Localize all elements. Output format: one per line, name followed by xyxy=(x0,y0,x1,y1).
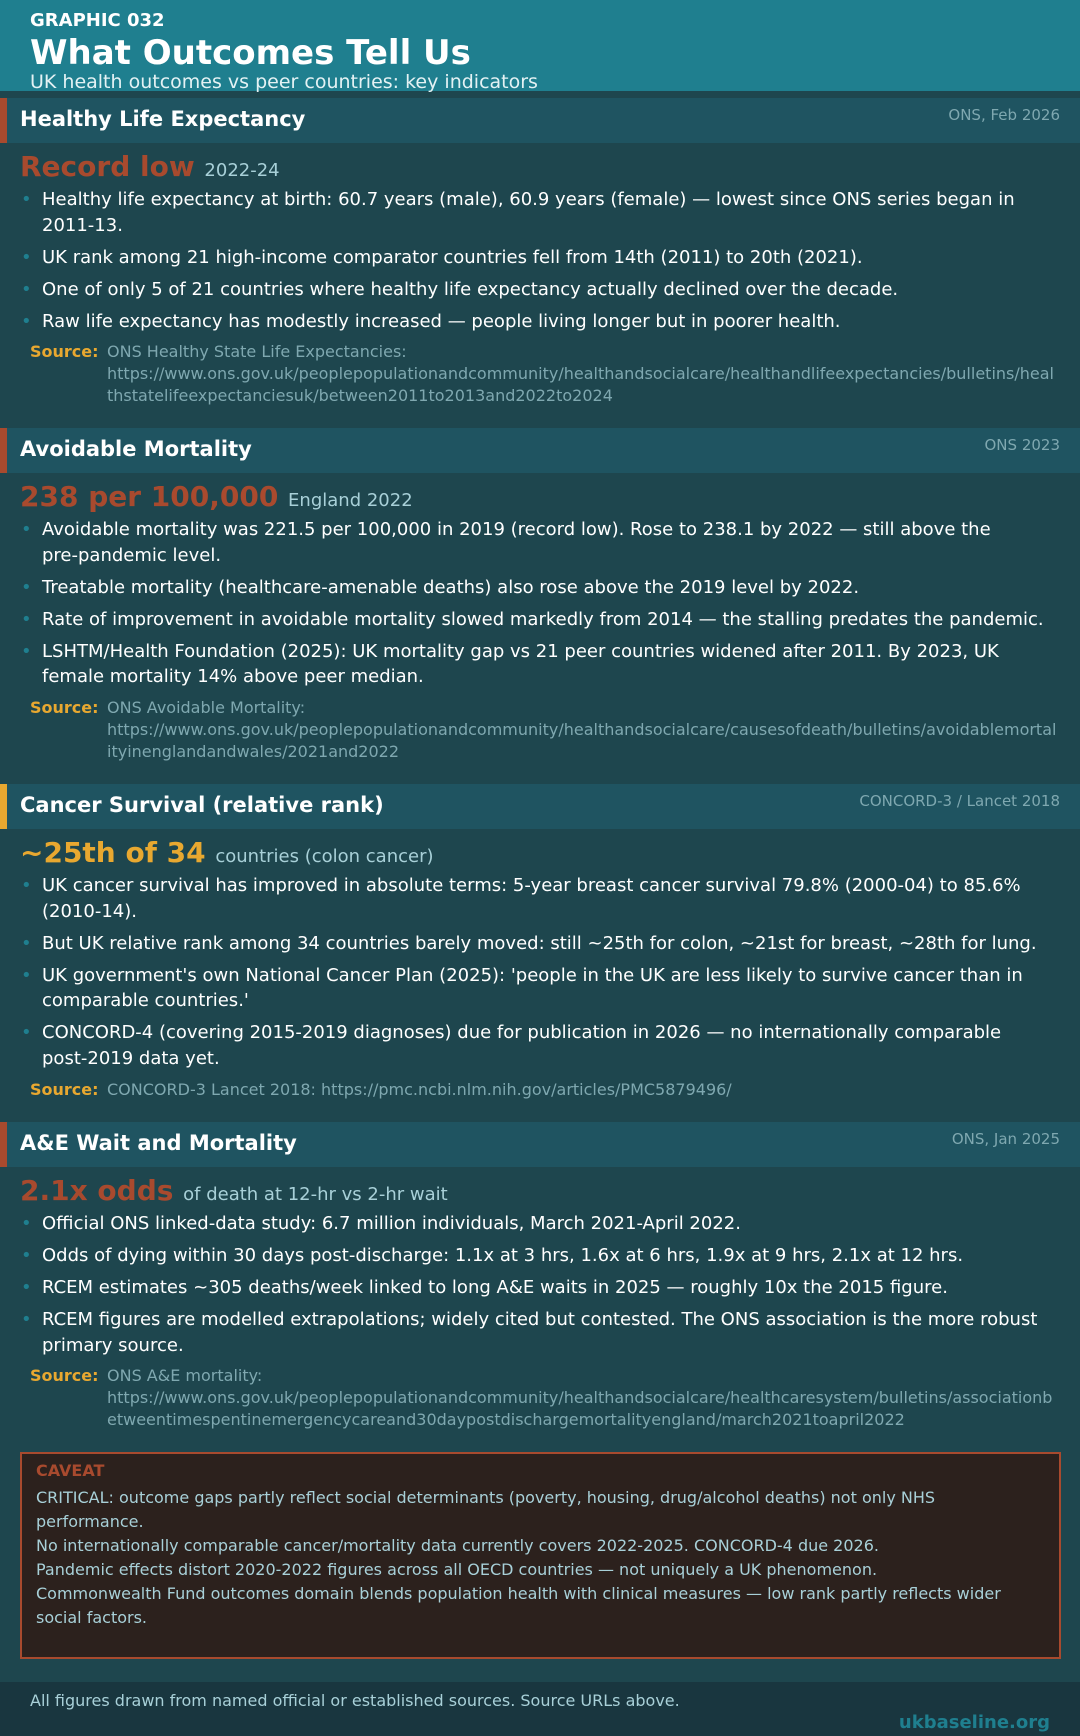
caveat text: Commonwealth Fund outcomes domain blends population health with clinical measures — low rank partly reflects wider xyxy=(36,1584,1001,1603)
caveat text xyxy=(36,1488,1001,1627)
section header: Avoidable Mortality xyxy=(0,428,1080,473)
source: healthy life expectancy xyxy=(30,342,1054,405)
key stat: record low: Record low 2022-24 xyxy=(20,150,280,183)
graphic number: GRAPHIC 032 xyxy=(30,10,165,31)
section header: Cancer Survival: Cancer Survival (relative rank) xyxy=(20,793,384,817)
bullet list: A&E: • xyxy=(21,1245,32,1266)
bullet list: cancer survival: • xyxy=(21,1022,32,1043)
bullet list: cancer survival: • xyxy=(21,875,32,896)
source: avoidable mortality: https://www.ons.gov.uk/peoplepopulationandcommunity/healthandsocialcare/causesofdeath/bulletins/avoidablemortal xyxy=(107,720,1056,739)
bullet list: A&E: RCEM figures are modelled extrapolations; widely cited but contested. The ONS association is the more robust xyxy=(42,1309,1037,1330)
bullet list: A&E: RCEM estimates ~305 deaths/week linked to long A&E waits in 2025 — roughly 10x the 2015 figure. xyxy=(42,1277,948,1298)
header banner xyxy=(0,0,1080,91)
section header: Avoidable Mortality: ONS 2023 xyxy=(984,436,1060,454)
section header: Healthy Life Expectancy xyxy=(0,98,1080,143)
source: healthy life expectancy: Source: xyxy=(30,342,99,360)
bullet list: cancer survival: • xyxy=(21,965,32,986)
bullet list: avoidable mortality: Rate of improvement in avoidable mortality slowed markedly from 2014 — the stalling predates the pandemic. xyxy=(42,609,1044,630)
bullet list: A&E: Odds of dying within 30 days post-discharge: 1.1x at 3 hrs, 1.6x at 6 hrs, 1.9x at 9 hrs, 2.1x at 12 hrs. xyxy=(42,1245,963,1266)
caveat text: No internationally comparable cancer/mortality data currently covers 2022-2025. CONCORD-4 due 2026. xyxy=(36,1536,879,1555)
source: avoidable mortality: Source: xyxy=(30,698,99,717)
bullet list: cancer survival: But UK relative rank among 34 countries barely moved: still ~25th for colon, ~21st for breast, ~28th for lung. xyxy=(42,933,1037,954)
bullet list: avoidable mortality: • xyxy=(21,577,32,598)
bullet list: healthy life expectancy: Raw life expectancy has modestly increased — people living longer but in poorer health. xyxy=(42,311,841,332)
footer brand: ukbaseline.org xyxy=(899,1712,1050,1733)
bullet list: healthy life expectancy: UK rank among 21 high-income comparator countries fell from 14th (2011) to 20th (2021). xyxy=(42,247,863,268)
bullet list: healthy life expectancy xyxy=(21,189,1015,332)
caveat text: Pandemic effects distort 2020-2022 figures across all OECD countries — not uniquely a UK phenomenon. xyxy=(36,1560,877,1579)
bullet list: A&E: primary source. xyxy=(42,1335,184,1356)
key stat: 25th of 34: ~25th of 34 countries (colon cancer) xyxy=(20,836,434,869)
bullet list: healthy life expectancy: • xyxy=(21,247,32,268)
bullet list: A&E xyxy=(21,1213,1037,1356)
bullet list: healthy life expectancy: 2011-13. xyxy=(42,215,123,236)
bullet list: A&E: • xyxy=(21,1213,32,1234)
source: healthy life expectancy: ONS Healthy State Life Expectancies: xyxy=(107,342,407,360)
section header: A&E wait and mortality: A&E Wait and Mortality xyxy=(20,1131,297,1155)
bullet list: cancer survival: (2010-14). xyxy=(42,901,137,922)
bullet list: avoidable mortality: pre-pandemic level. xyxy=(42,545,221,566)
source: healthy life expectancy: thstatelifeexpectanciesuk/between2011to2013and2022to2024 xyxy=(107,386,613,405)
bullet list: cancer survival: post-2019 data yet. xyxy=(42,1048,220,1069)
bullet list: cancer survival: UK cancer survival has improved in absolute terms: 5-year breast cancer survival 79.8% (2000-04) to 85.6% xyxy=(42,875,1021,896)
section header: A&E wait and mortality xyxy=(0,1122,1080,1167)
source: A&E: ONS A&E mortality: xyxy=(107,1366,262,1385)
bullet list: healthy life expectancy: Healthy life expectancy at birth: 60.7 years (male), 60.9 years (female) — lowest since ONS series began in xyxy=(42,189,1015,210)
section header: A&E wait and mortality: ONS, Jan 2025 xyxy=(952,1130,1060,1148)
bullet list: cancer survival: • xyxy=(21,933,32,954)
bullet list: avoidable mortality: Avoidable mortality was 221.5 per 100,000 in 2019 (record low). Rose to 238.1 by 2022 — still above the xyxy=(42,519,991,540)
bullet list: A&E: • xyxy=(21,1309,32,1330)
source: A&E: https://www.ons.gov.uk/peoplepopulationandcommunity/healthandsocialcare/healthcaresystem/bulletins/associationb xyxy=(107,1388,1052,1407)
source: avoidable mortality xyxy=(30,698,1056,761)
title: What Outcomes Tell Us xyxy=(30,33,471,73)
bullet list: avoidable mortality: LSHTM/Health Foundation (2025): UK mortality gap vs 21 peer countries widened after 2011. By 2023, UK xyxy=(42,641,999,662)
bullet list: cancer survival: comparable countries.' xyxy=(42,990,249,1011)
bullet list: cancer survival: UK government's own National Cancer Plan (2025): 'people in the UK are less likely to survive cancer than in xyxy=(42,965,1023,986)
footer note: All figures drawn from named official or established sources. Source URLs above. xyxy=(30,1691,680,1710)
caveat heading: CAVEAT xyxy=(36,1461,104,1480)
source: cancer survival: CONCORD-3 Lancet 2018: https://pmc.ncbi.nlm.nih.gov/articles/PMC5879496/ xyxy=(107,1080,732,1099)
section header: Healthy Life Expectancy: ONS, Feb 2026 xyxy=(948,106,1060,124)
key stat: 238 per 100,000: 238 per 100,000 England 2022 xyxy=(20,480,413,513)
source: avoidable mortality: ONS Avoidable Mortality: xyxy=(107,698,305,717)
source: avoidable mortality: ityinenglandandwales/2021and2022 xyxy=(107,742,399,761)
bullet list: cancer survival: CONCORD-4 (covering 2015-2019 diagnoses) due for publication in 2026 — no internationally comparable xyxy=(42,1022,1001,1043)
bullet list: healthy life expectancy: • xyxy=(21,311,32,332)
caveat text: performance. xyxy=(36,1512,144,1531)
source: A&E: Source: xyxy=(30,1366,99,1385)
caveat text: social factors. xyxy=(36,1608,147,1627)
source: A&E: etweentimespentinemergencycareand30daypostdischargemortalityengland/march2021toapril2022 xyxy=(107,1410,905,1429)
caveat box xyxy=(20,1452,1061,1659)
bullet list: avoidable mortality: female mortality 14% above peer median. xyxy=(42,666,424,687)
bullet list: A&E: • xyxy=(21,1277,32,1298)
footer xyxy=(0,1682,1080,1736)
bullet list: avoidable mortality xyxy=(21,519,1044,687)
section header: Cancer Survival: CONCORD-3 / Lancet 2018 xyxy=(859,792,1060,810)
section header: Cancer Survival xyxy=(0,784,1080,829)
bullet list: cancer survival xyxy=(21,875,1037,1069)
bullet list: avoidable mortality: Treatable mortality (healthcare-amenable deaths) also rose above the 2019 level by 2022. xyxy=(42,577,859,598)
bullet list: healthy life expectancy: • xyxy=(21,279,32,300)
bullet list: avoidable mortality: • xyxy=(21,609,32,630)
bullet list: avoidable mortality: • xyxy=(21,641,32,662)
key stat: 2.1x odds: 2.1x odds of death at 12-hr vs 2-hr wait xyxy=(20,1174,448,1207)
subtitle: UK health outcomes vs peer countries: key indicators xyxy=(30,71,538,93)
source: cancer survival: Source: xyxy=(30,1080,99,1099)
bullet list: healthy life expectancy: • xyxy=(21,189,32,210)
source: A&E xyxy=(30,1366,1052,1429)
bullet list: A&E: Official ONS linked-data study: 6.7 million individuals, March 2021-April 2022. xyxy=(42,1213,741,1234)
section header: Healthy Life Expectancy: Healthy Life Expectancy xyxy=(20,107,305,131)
bullet list: healthy life expectancy: One of only 5 of 21 countries where healthy life expectancy actually declined over the decade. xyxy=(42,279,898,300)
bullet list: avoidable mortality: • xyxy=(21,519,32,540)
source: healthy life expectancy: https://www.ons.gov.uk/peoplepopulationandcommunity/healthandsocialcare/healthandlifeexpectancies/bulletins/heal xyxy=(107,364,1054,383)
caveat text: CRITICAL: outcome gaps partly reflect social determinants (poverty, housing, drug/alcohol deaths) not only NHS xyxy=(36,1488,935,1507)
section header: Avoidable Mortality: Avoidable Mortality xyxy=(20,437,252,461)
